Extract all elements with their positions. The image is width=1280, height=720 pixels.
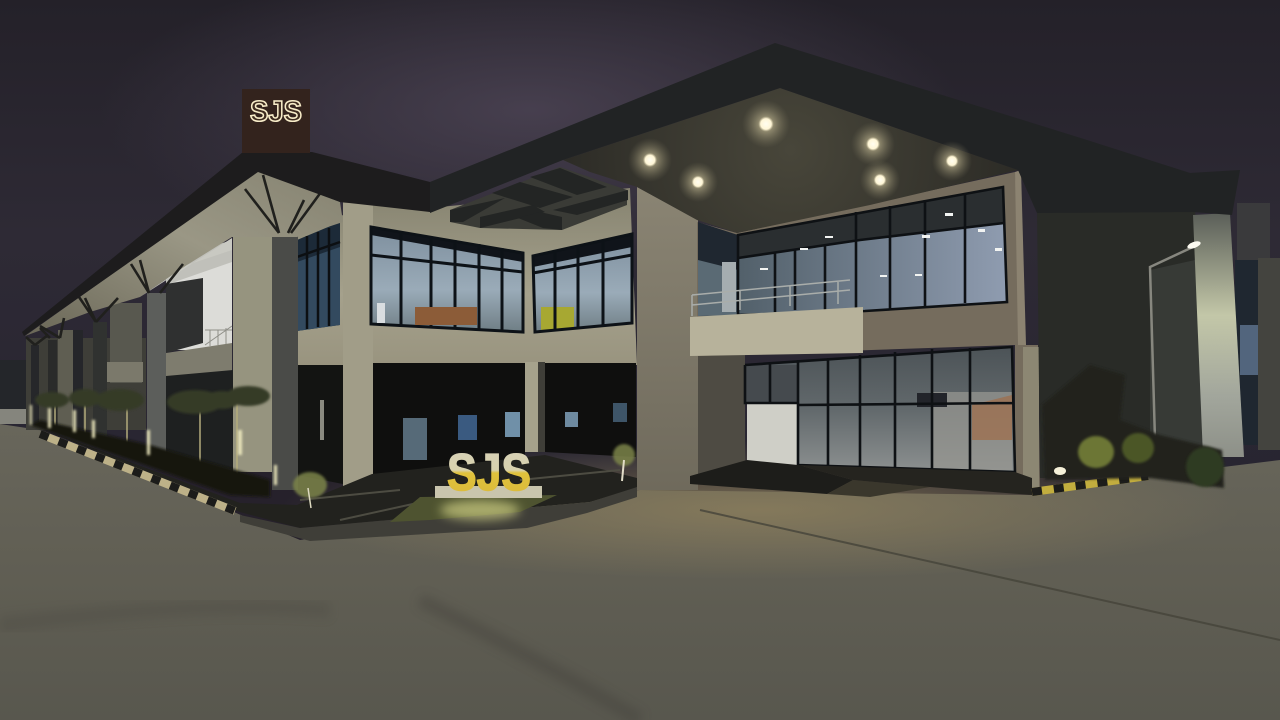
dark side wall	[1037, 205, 1203, 478]
lower glazing	[745, 347, 1015, 472]
person silhouette	[377, 303, 385, 323]
ground floor storefronts	[297, 365, 343, 484]
store reflections	[320, 400, 627, 460]
planter kerb	[240, 487, 637, 541]
plinth	[798, 465, 1032, 495]
lamp post	[1150, 246, 1195, 440]
striped kerb	[40, 434, 235, 511]
window 1	[371, 227, 523, 332]
window 2	[533, 234, 632, 332]
left small window	[297, 222, 340, 331]
slab	[166, 343, 232, 378]
ground: concrete forecourt	[0, 424, 1280, 720]
upper main glazing	[738, 187, 1007, 315]
far bays	[26, 338, 146, 430]
small lit shrubs	[293, 444, 635, 508]
cream columns	[343, 203, 373, 487]
right striped kerb	[1032, 476, 1148, 492]
roof fascia and side	[430, 43, 1240, 215]
soffit	[563, 88, 1018, 233]
dark paving	[45, 430, 637, 528]
landscaped planter with kerb	[40, 430, 1148, 541]
coffer lattice	[450, 167, 628, 230]
white inner wall	[166, 240, 232, 350]
building: left wing	[26, 235, 273, 472]
balcony railing	[692, 280, 850, 316]
right wall upper	[697, 172, 1040, 490]
SJS roof sign: SJS	[250, 96, 302, 128]
dark front column	[272, 236, 298, 490]
lit column	[1193, 213, 1244, 457]
tower	[637, 187, 698, 490]
SJS illuminated ground sign: SJS	[447, 444, 531, 502]
recess beside tower	[698, 355, 745, 478]
building: main right block	[430, 43, 1280, 497]
ceiling lights seen in glass	[760, 213, 1002, 277]
building: left block upper wall	[272, 188, 637, 490]
upper left glazing	[698, 222, 738, 316]
balcony parapet	[690, 307, 863, 356]
grass	[390, 495, 557, 522]
distant treeline	[0, 360, 45, 424]
SJS roof sign	[242, 89, 310, 153]
night sky	[0, 0, 1280, 470]
V struts	[26, 175, 324, 345]
far building	[1237, 203, 1270, 261]
lamp	[1186, 240, 1202, 250]
left canopy soffit	[22, 152, 430, 345]
trees and uplights, left wing	[30, 386, 277, 497]
entrance step	[690, 460, 853, 494]
balcony glass panel	[166, 278, 203, 353]
window 1 furniture	[415, 307, 477, 325]
ceiling downlights	[628, 100, 972, 202]
door	[747, 403, 798, 465]
right planting bed	[1042, 365, 1224, 488]
left roof fascia	[22, 152, 430, 336]
grey column	[147, 293, 166, 460]
pale column	[233, 235, 273, 472]
